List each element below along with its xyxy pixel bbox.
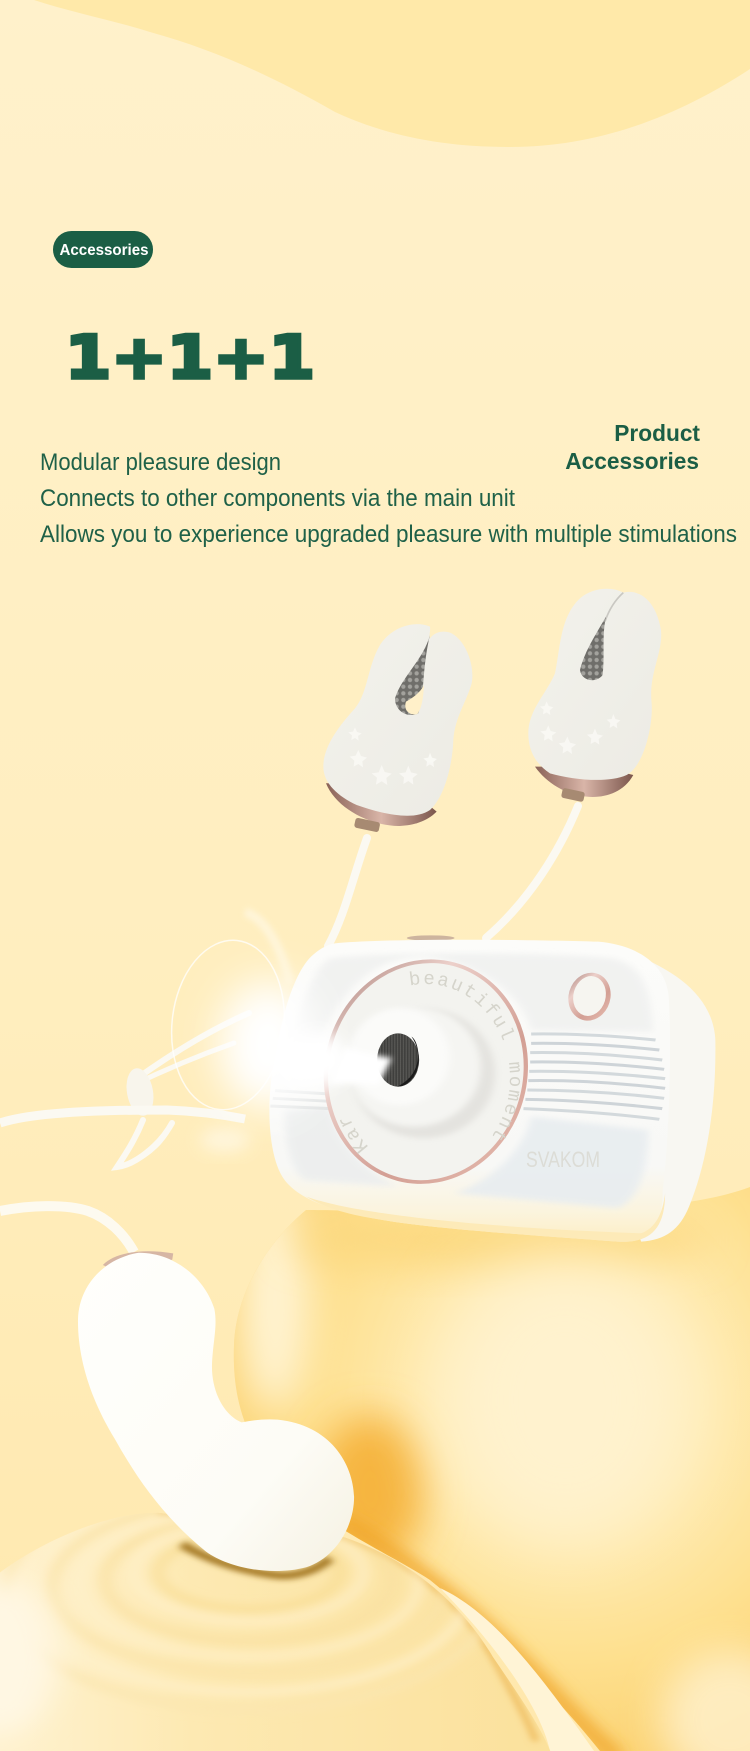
front recess panel upper — [289, 953, 653, 1057]
slit line — [605, 593, 623, 622]
rabbit clip right — [528, 589, 661, 802]
description text — [40, 449, 737, 548]
description text: Modular pleasure design — [40, 449, 281, 476]
front body — [269, 940, 670, 1242]
ring lettering: moment — [492, 1062, 520, 1140]
large yellow blob — [234, 1187, 750, 1751]
clip cords — [328, 806, 578, 946]
front recess panel lower — [455, 1117, 648, 1208]
top button nub — [407, 935, 455, 941]
connector — [561, 788, 585, 802]
vibrator cord — [0, 1206, 134, 1252]
rabbit body — [323, 624, 472, 816]
cone base shadow — [352, 1008, 495, 1138]
label: Product Accessories: Accessories — [565, 448, 699, 474]
bottom cream — [306, 1193, 665, 1242]
hole shadow — [397, 1037, 419, 1087]
ring inner face — [320, 960, 532, 1184]
ripple mound — [0, 1513, 550, 1751]
cream band between shapes — [440, 1588, 594, 1751]
rabbit clip left — [323, 624, 472, 832]
ring — [316, 956, 536, 1188]
power button — [566, 971, 613, 1022]
ribs — [270, 1034, 665, 1119]
heading: 1+1+1: 1+1+1 — [65, 323, 315, 393]
rose base — [535, 767, 633, 797]
slit patch — [580, 617, 606, 680]
slit — [395, 635, 430, 715]
rose cap — [103, 1251, 173, 1269]
description text: Connects to other components via the main unit — [40, 485, 515, 512]
air pulse glow — [163, 912, 392, 1152]
main unit camera body — [269, 935, 715, 1242]
back panel — [574, 950, 715, 1242]
back cords of main unit — [117, 1013, 249, 1167]
cone — [347, 1007, 481, 1127]
tag: Accessories: Accessories — [60, 242, 148, 259]
tag: Accessories — [53, 231, 153, 268]
cord pod — [123, 1066, 157, 1118]
top wave — [34, 0, 750, 147]
label: Product Accessories: Product — [614, 420, 700, 446]
cone hole — [377, 1033, 419, 1087]
star marks — [540, 701, 620, 754]
rabbit body — [528, 589, 661, 780]
SVAKOM logo: SVAKOM — [526, 1147, 600, 1172]
front cord — [0, 1110, 245, 1123]
insertable vibrator — [78, 1251, 354, 1571]
ring lettering: Kar — [340, 1120, 368, 1154]
rose base — [326, 783, 437, 826]
slit hole — [405, 685, 424, 714]
vibrator body — [78, 1253, 354, 1571]
ring lettering: beautiful — [410, 971, 514, 1040]
cone top — [349, 1008, 450, 1105]
ring lettering — [340, 971, 520, 1154]
lower-left panel — [285, 1107, 397, 1187]
star marks — [348, 727, 437, 785]
label: Product Accessories — [565, 420, 700, 474]
connector — [354, 817, 380, 832]
